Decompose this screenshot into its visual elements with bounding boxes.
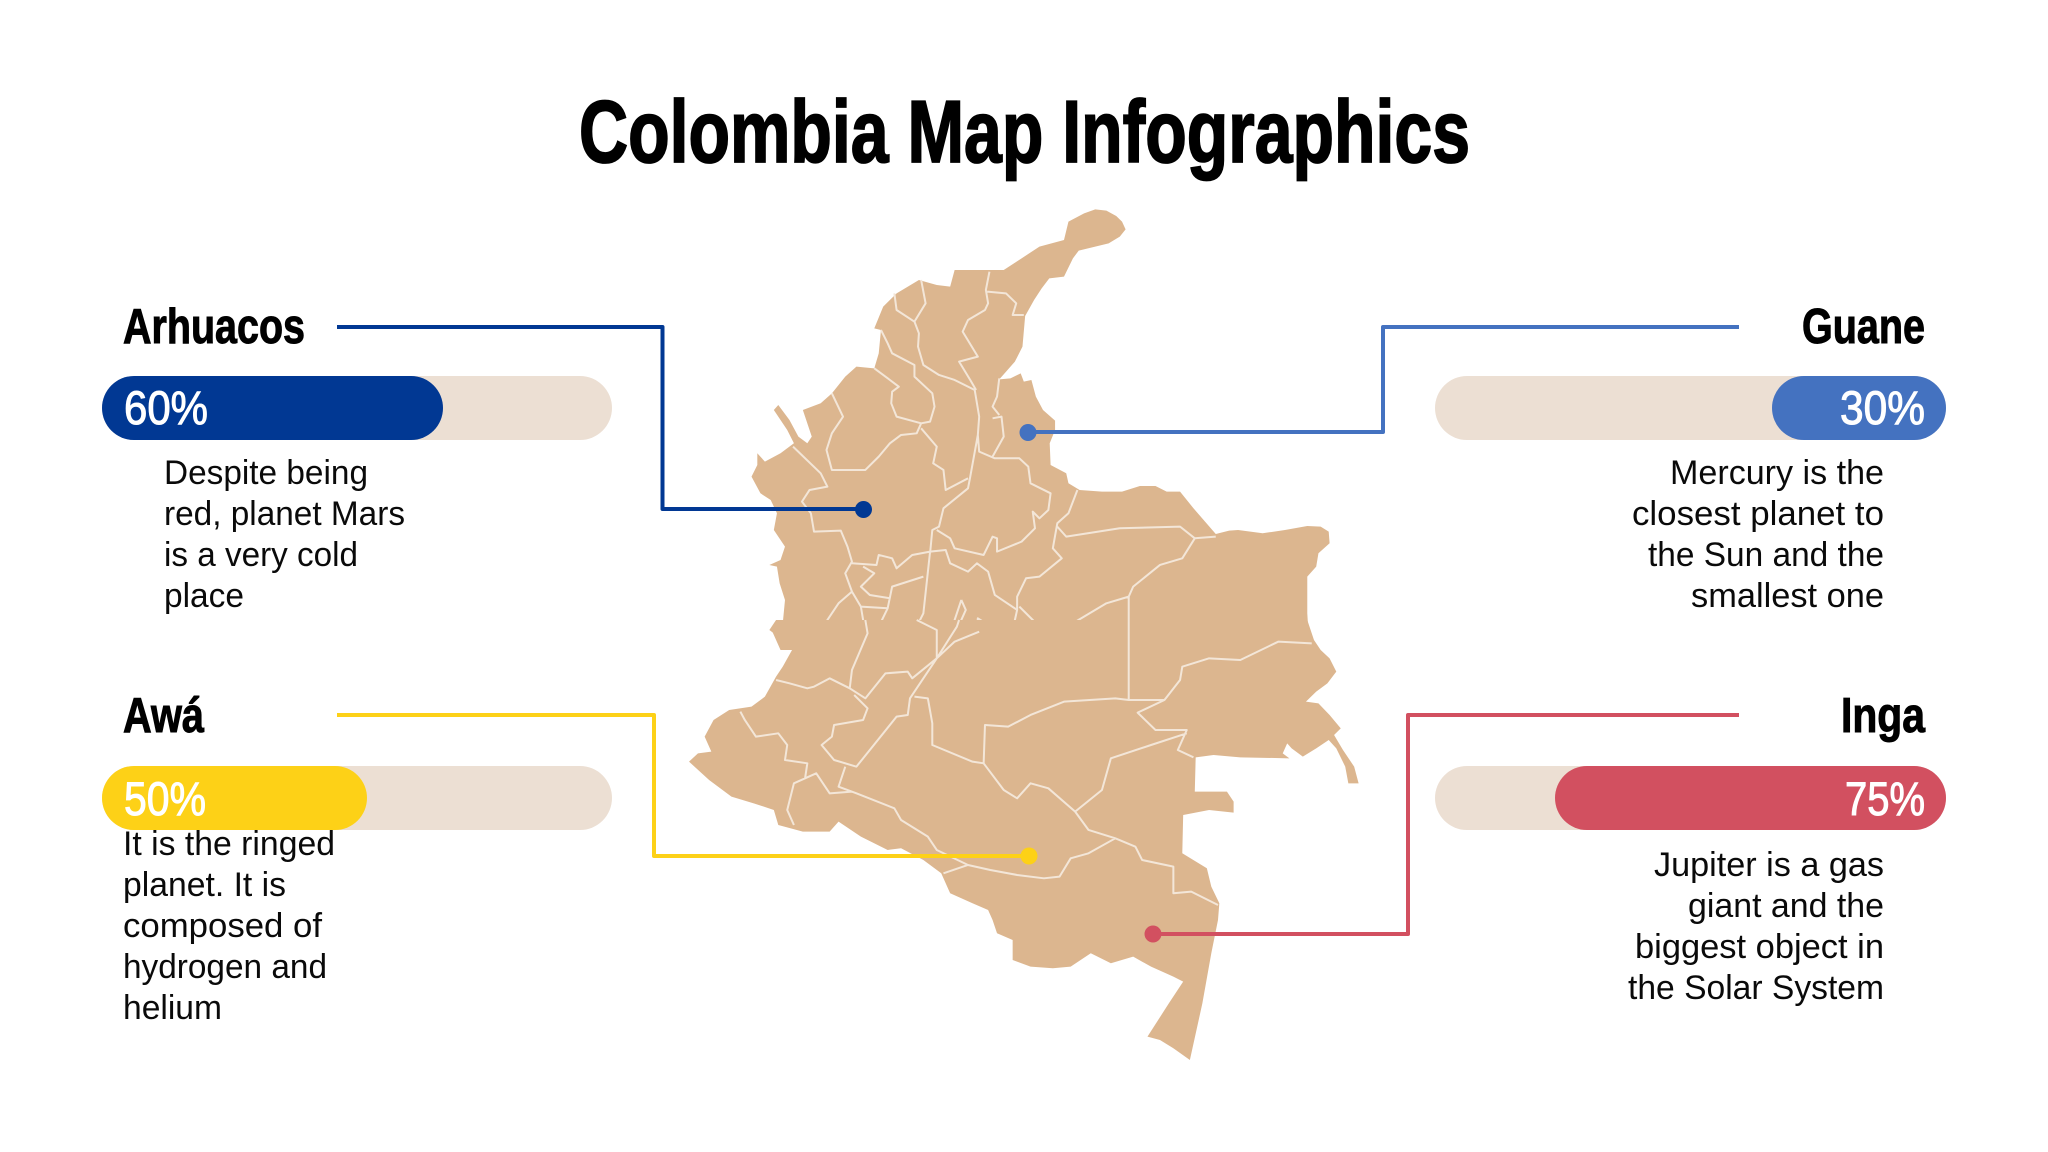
- connector: Awá: [337, 715, 1038, 864]
- text: Awá description: planet. It is: [123, 866, 286, 904]
- map: southern half: [689, 620, 1359, 1060]
- title: Colombia Map Infographics: [579, 82, 1470, 181]
- progress bar: 30%: [1435, 376, 1946, 440]
- text: Inga description: biggest object in: [1635, 928, 1884, 966]
- connector: Arhuacos: [337, 327, 872, 518]
- text: Arhuacos description: is a very cold: [164, 536, 358, 574]
- progress bar: 50%: 50%: [124, 772, 206, 825]
- connector: Guane: [1020, 327, 1739, 441]
- progress bar: 75%: 75%: [1845, 772, 1925, 825]
- text: Awá description: It is the ringed: [123, 825, 335, 863]
- text: Guane description: closest planet to: [1632, 495, 1884, 533]
- text: Guane description: the Sun and the: [1648, 536, 1884, 574]
- text: Inga description: the Solar System: [1628, 969, 1884, 1007]
- text: Arhuacos description: Despite being: [164, 454, 368, 492]
- text: Arhuacos description: [164, 454, 405, 615]
- text: Awá description: helium: [123, 989, 222, 1027]
- progress bar: 75%: [1435, 766, 1946, 830]
- map of Colombia: [689, 209, 1359, 1060]
- progress bar: 60%: [102, 376, 612, 440]
- text: Inga description: giant and the: [1688, 887, 1884, 925]
- text: Guane description: [1632, 454, 1884, 615]
- text: Awá description: hydrogen and: [123, 948, 327, 986]
- progress bar: 30%: 30%: [1840, 381, 1925, 434]
- connector: Inga: [1144, 715, 1739, 942]
- text: Guane description: Mercury is the: [1670, 454, 1884, 492]
- panel: Inga: [1144, 689, 1946, 1007]
- text: Awá description: [123, 825, 335, 1027]
- panel: Guane: [1020, 300, 1946, 615]
- heading: Guane: Guane: [1802, 300, 1925, 354]
- heading: Awá: Awá: [123, 689, 205, 743]
- heading: Arhuacos: Arhuacos: [123, 300, 305, 354]
- text: Guane description: smallest one: [1691, 577, 1884, 615]
- text: Inga description: [1628, 846, 1884, 1007]
- progress bar: 50%: [102, 766, 612, 830]
- text: Awá description: composed of: [123, 907, 323, 945]
- heading: Inga: Inga: [1841, 689, 1926, 743]
- text: Inga description: Jupiter is a gas: [1654, 846, 1884, 884]
- panel: Awá: [102, 689, 1038, 1027]
- panel: Arhuacos: [102, 300, 872, 615]
- text: Arhuacos description: place: [164, 577, 244, 615]
- text: Arhuacos description: red, planet Mars: [164, 495, 405, 533]
- progress bar: 60%: 60%: [124, 381, 208, 434]
- map: northern half: [752, 209, 1330, 650]
